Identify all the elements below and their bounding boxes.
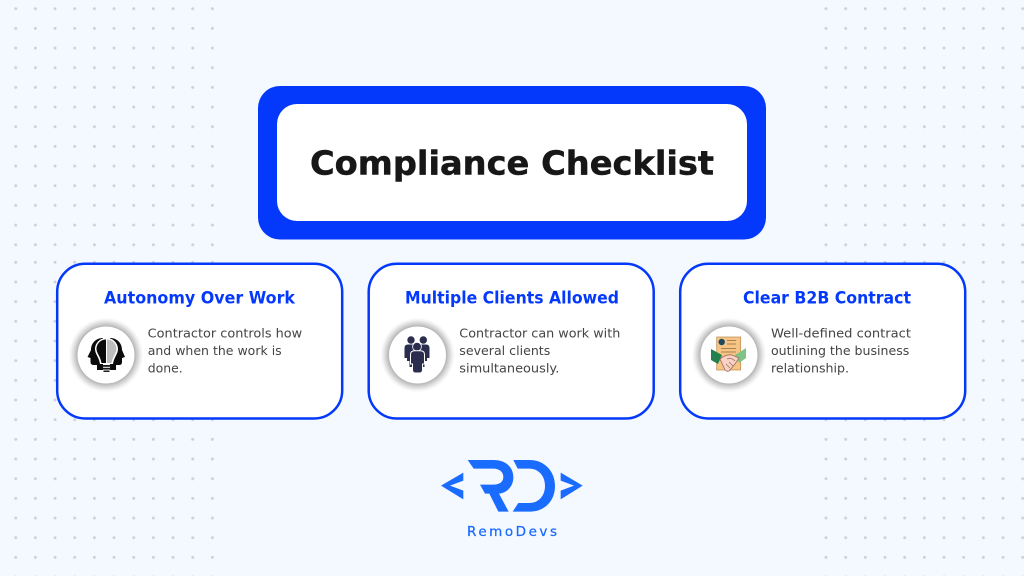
icon: contract with handshake (692, 318, 766, 392)
heading: autonomy over work: Autonomy Over Work (104, 288, 296, 308)
logo mark (441, 460, 583, 512)
description: clear b2b contract (771, 325, 911, 376)
panel: clear b2b contract (680, 264, 965, 418)
heading: multiple clients allowed: Multiple Clients Allowed (405, 288, 619, 308)
title panel (258, 86, 766, 240)
description: multiple clients allowed (459, 325, 620, 376)
panel: autonomy over work (57, 264, 342, 418)
logo: RemoDevs (441, 460, 583, 540)
title: Compliance Checklist (310, 143, 714, 182)
description: multiple clients allowed: several clients (459, 343, 550, 358)
description: autonomy over work: done. (148, 360, 183, 376)
description: autonomy over work (148, 325, 302, 376)
heading: clear b2b contract: Clear B2B Contract (743, 288, 911, 308)
description: clear b2b contract: relationship. (771, 360, 849, 376)
description: clear b2b contract: Well-defined contract (771, 325, 911, 340)
icon: heads with light bulb (68, 318, 144, 392)
description: multiple clients allowed: Contractor can work with (459, 325, 620, 340)
panel: multiple clients allowed (369, 264, 654, 418)
description: autonomy over work: Contractor controls how (148, 325, 302, 340)
description: autonomy over work: and when the work is (148, 343, 282, 358)
logo wordmark: RemoDevs (467, 524, 557, 540)
icon: group of people (380, 318, 455, 392)
description: clear b2b contract: outlining the business (771, 343, 909, 358)
description: multiple clients allowed: simultaneously. (459, 360, 559, 376)
